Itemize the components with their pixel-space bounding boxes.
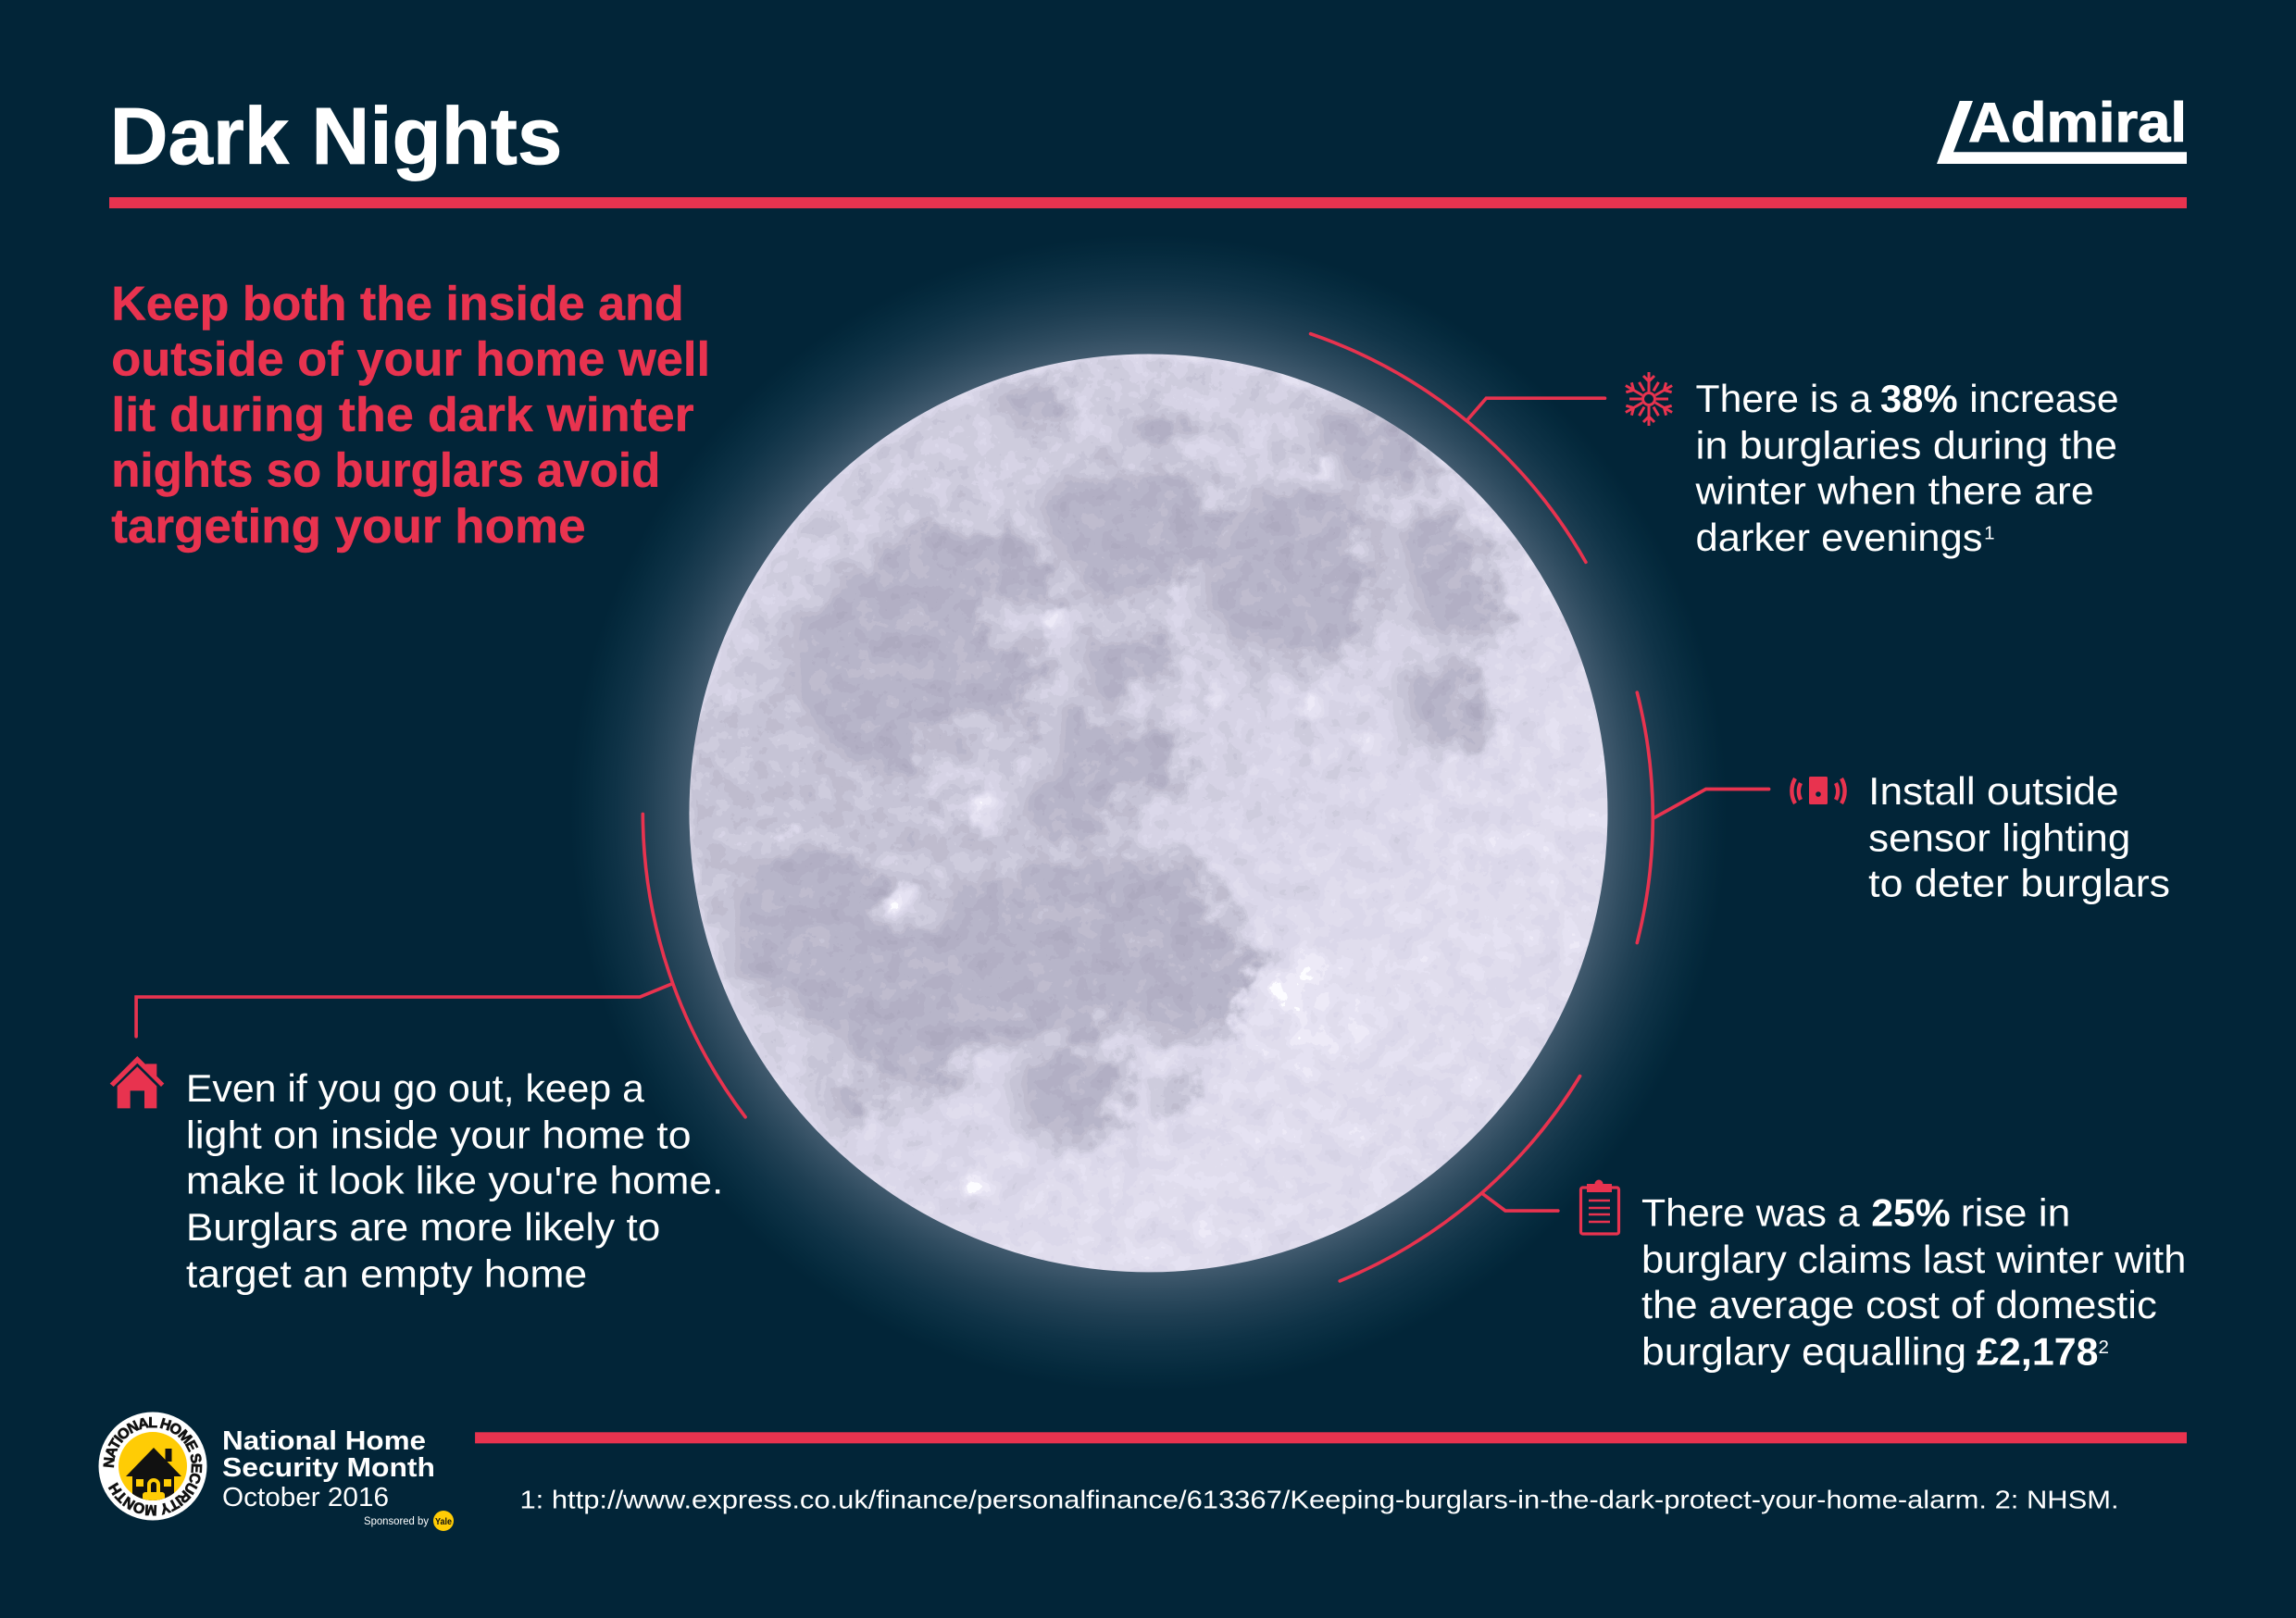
icon: Yale logo	[433, 1511, 454, 1531]
text: keep a light on: make it look like you're home.	[186, 1159, 723, 1202]
text: 25% rise: burglary claims last winter with	[1641, 1238, 2186, 1281]
arc and connector: 25% rise	[1340, 1076, 1580, 1281]
text: 38% increase: darker evenings	[1696, 516, 1983, 559]
badge caption: October 2016	[222, 1483, 389, 1512]
red intro heading: lit during the dark winter	[111, 389, 694, 442]
icon: Yale logo: Yale	[435, 1517, 452, 1527]
text: 25% rise: 25%	[1871, 1190, 1951, 1234]
red intro heading	[111, 277, 710, 554]
text: keep a light on: light on inside your home to	[186, 1113, 692, 1156]
badge caption: Security Month	[222, 1453, 435, 1483]
moon glow	[570, 235, 1727, 1391]
arc and connector: keep a light on	[136, 814, 745, 1117]
text: 25% rise: rise in	[1961, 1190, 2070, 1234]
badge house	[126, 1448, 181, 1500]
text: 38% increase: 38%	[1880, 377, 1958, 420]
text: 25% rise: 2	[2098, 1337, 2109, 1358]
text: 38% increase: There is a	[1696, 377, 1872, 420]
Admiral logo: Admiral	[1968, 92, 2187, 154]
text: sensor lighting: sensor lighting	[1868, 815, 2130, 859]
text: keep a light on: Even if you go out, keep a	[186, 1066, 645, 1110]
arc and connector: sensor lighting	[1637, 692, 1769, 943]
badge caption: Sponsored by	[364, 1516, 429, 1527]
moon illustration	[674, 337, 1626, 1288]
text: 38% increase: increase	[1969, 377, 2119, 420]
text: sensor lighting: to deter burglars	[1868, 861, 2170, 904]
text: 38% increase	[1694, 377, 2119, 559]
footnote: 1: http://www.express.co.uk/finance/personalfinance/613367/Keeping-burglars-in-the-dark-protect-your-home-alarm. 2: NHSM.	[519, 1486, 2119, 1514]
text: 25% rise: the average cost of domestic	[1641, 1283, 2157, 1326]
badge caption	[222, 1426, 435, 1527]
text: 25% rise: There was a	[1641, 1190, 1860, 1234]
badge ring text: NATIONAL HOME SECURITY MONTH	[103, 1416, 202, 1516]
text: sensor lighting	[1868, 769, 2170, 904]
icon: house	[110, 1056, 164, 1108]
icon: clipboard	[1581, 1179, 1618, 1234]
header rule	[109, 197, 2187, 208]
text: keep a light on: target an empty home	[186, 1252, 587, 1296]
red intro heading: Keep both the inside and	[111, 277, 684, 330]
badge caption: National Home	[222, 1426, 426, 1456]
text: 38% increase: in burglaries during the	[1696, 424, 2117, 467]
text: 38% increase: 1	[1984, 523, 1995, 544]
red intro heading: nights so burglars avoid	[111, 444, 660, 498]
text: keep a light on: Burglars are more likely to	[186, 1205, 660, 1249]
red intro heading: outside of your home well	[111, 333, 710, 387]
text: 25% rise	[1641, 1190, 2186, 1374]
text: 25% rise: £2,178	[1977, 1330, 2098, 1374]
icon: sensor light	[1791, 777, 1845, 804]
arc and connector: 38% increase	[1311, 334, 1604, 562]
text: sensor lighting: Install outside	[1868, 769, 2119, 813]
bottom rule	[475, 1432, 2187, 1443]
text: 38% increase: winter when there are	[1694, 469, 2094, 513]
icon: snowflake	[1623, 372, 1675, 426]
text: 25% rise: burglary equalling	[1641, 1330, 1966, 1374]
badge: National Home Security Month	[98, 1413, 207, 1520]
text: keep a light on	[186, 1066, 723, 1296]
red intro heading: targeting your home	[111, 500, 586, 554]
title: Dark Nights	[110, 92, 562, 181]
